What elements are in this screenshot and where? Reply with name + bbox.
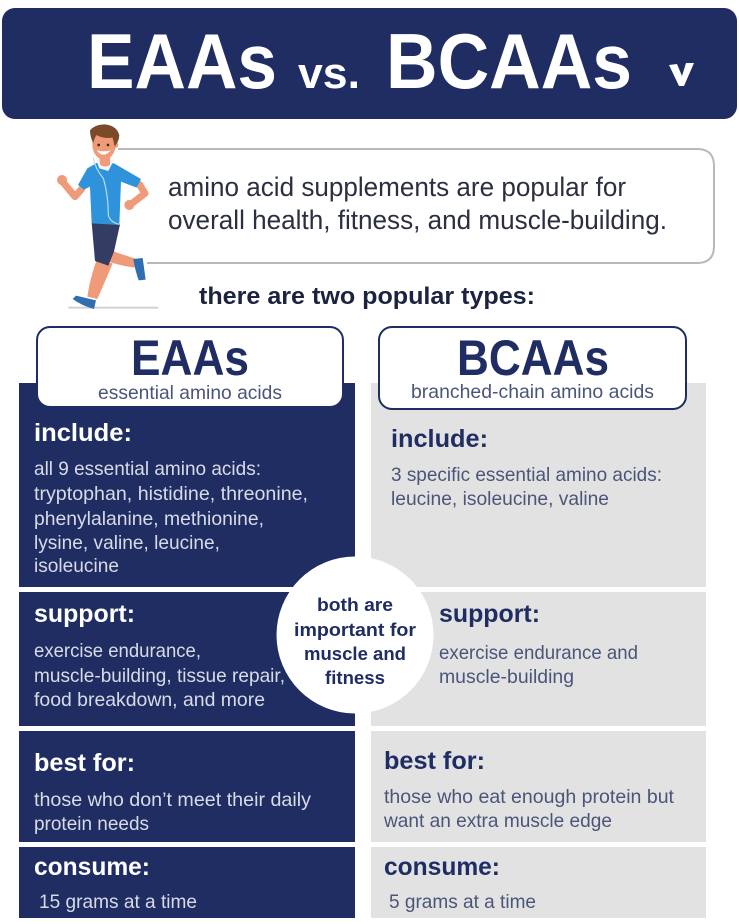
- EAAs best for: protein needs: [34, 813, 149, 835]
- BCAAs header card: branched-chain amino acids: [411, 381, 654, 403]
- center callout circle: fitness: [325, 667, 385, 688]
- EAAs support: food breakdown, and more: [34, 689, 265, 711]
- BCAAs include: [391, 425, 662, 510]
- BCAAs support: support:: [439, 600, 540, 628]
- BCAAs header card: [379, 327, 686, 409]
- icon: running man: [57, 124, 158, 309]
- EAAs include: all 9 essential amino acids:: [34, 458, 261, 480]
- EAAs best for: best for:: [34, 749, 135, 777]
- BCAAs consume: [384, 853, 536, 913]
- panel: EAAs column: [19, 327, 355, 918]
- EAAs support: support:: [34, 600, 135, 628]
- center callout circle: both are: [317, 594, 393, 615]
- EAAs include: [34, 419, 308, 577]
- center callout circle: [276, 556, 434, 714]
- intro speech box: amino acid supplements are popular for: [168, 172, 626, 202]
- EAAs header card: EAAs: [131, 330, 249, 386]
- EAAs consume: [34, 853, 197, 913]
- EAAs header card: essential amino acids: [98, 382, 282, 404]
- BCAAs best for: want an extra muscle edge: [383, 810, 612, 832]
- icon: brand logo: [669, 63, 694, 86]
- EAAs best for: those who don’t meet their daily: [34, 789, 311, 811]
- EAAs include: isoleucine: [34, 555, 119, 577]
- EAAs best for: [34, 749, 311, 835]
- subheading: there are two popular types:: [199, 283, 535, 310]
- BCAAs support: [439, 600, 638, 688]
- title banner: vs.: [298, 49, 360, 98]
- BCAAs header card: BCAAs: [457, 330, 609, 386]
- BCAAs best for: [383, 747, 675, 832]
- intro speech box: overall health, fitness, and muscle-building.: [168, 205, 667, 235]
- EAAs include: lysine, valine, leucine,: [34, 532, 220, 554]
- EAAs support: exercise endurance,: [34, 640, 201, 662]
- EAAs consume: consume:: [34, 853, 150, 881]
- EAAs header card: [37, 327, 343, 407]
- BCAAs support: exercise endurance and: [439, 642, 638, 664]
- BCAAs consume: 5 grams at a time: [389, 891, 536, 913]
- title banner: BCAAs: [386, 17, 632, 105]
- intro speech box: [118, 149, 714, 263]
- BCAAs consume: consume:: [384, 853, 500, 881]
- BCAAs include: 3 specific essential amino acids:: [391, 464, 662, 486]
- panel: BCAAs column: [371, 327, 706, 918]
- BCAAs include: leucine, isoleucine, valine: [391, 488, 609, 510]
- BCAAs best for: those who eat enough protein but: [384, 786, 675, 808]
- title banner: [2, 8, 737, 119]
- EAAs support: muscle-building, tissue repair,: [34, 665, 285, 687]
- center callout circle: muscle and: [304, 643, 406, 664]
- BCAAs best for: best for:: [384, 747, 485, 775]
- EAAs support: [34, 600, 285, 711]
- EAAs include: tryptophan, histidine, threonine,: [34, 483, 308, 505]
- BCAAs include: include:: [391, 425, 488, 453]
- EAAs include: include:: [34, 419, 132, 447]
- center callout circle: important for: [294, 619, 416, 640]
- EAAs include: phenylalanine, methionine,: [34, 508, 264, 530]
- title banner: EAAs: [87, 17, 277, 105]
- BCAAs support: muscle-building: [439, 666, 574, 688]
- EAAs consume: 15 grams at a time: [39, 891, 197, 913]
